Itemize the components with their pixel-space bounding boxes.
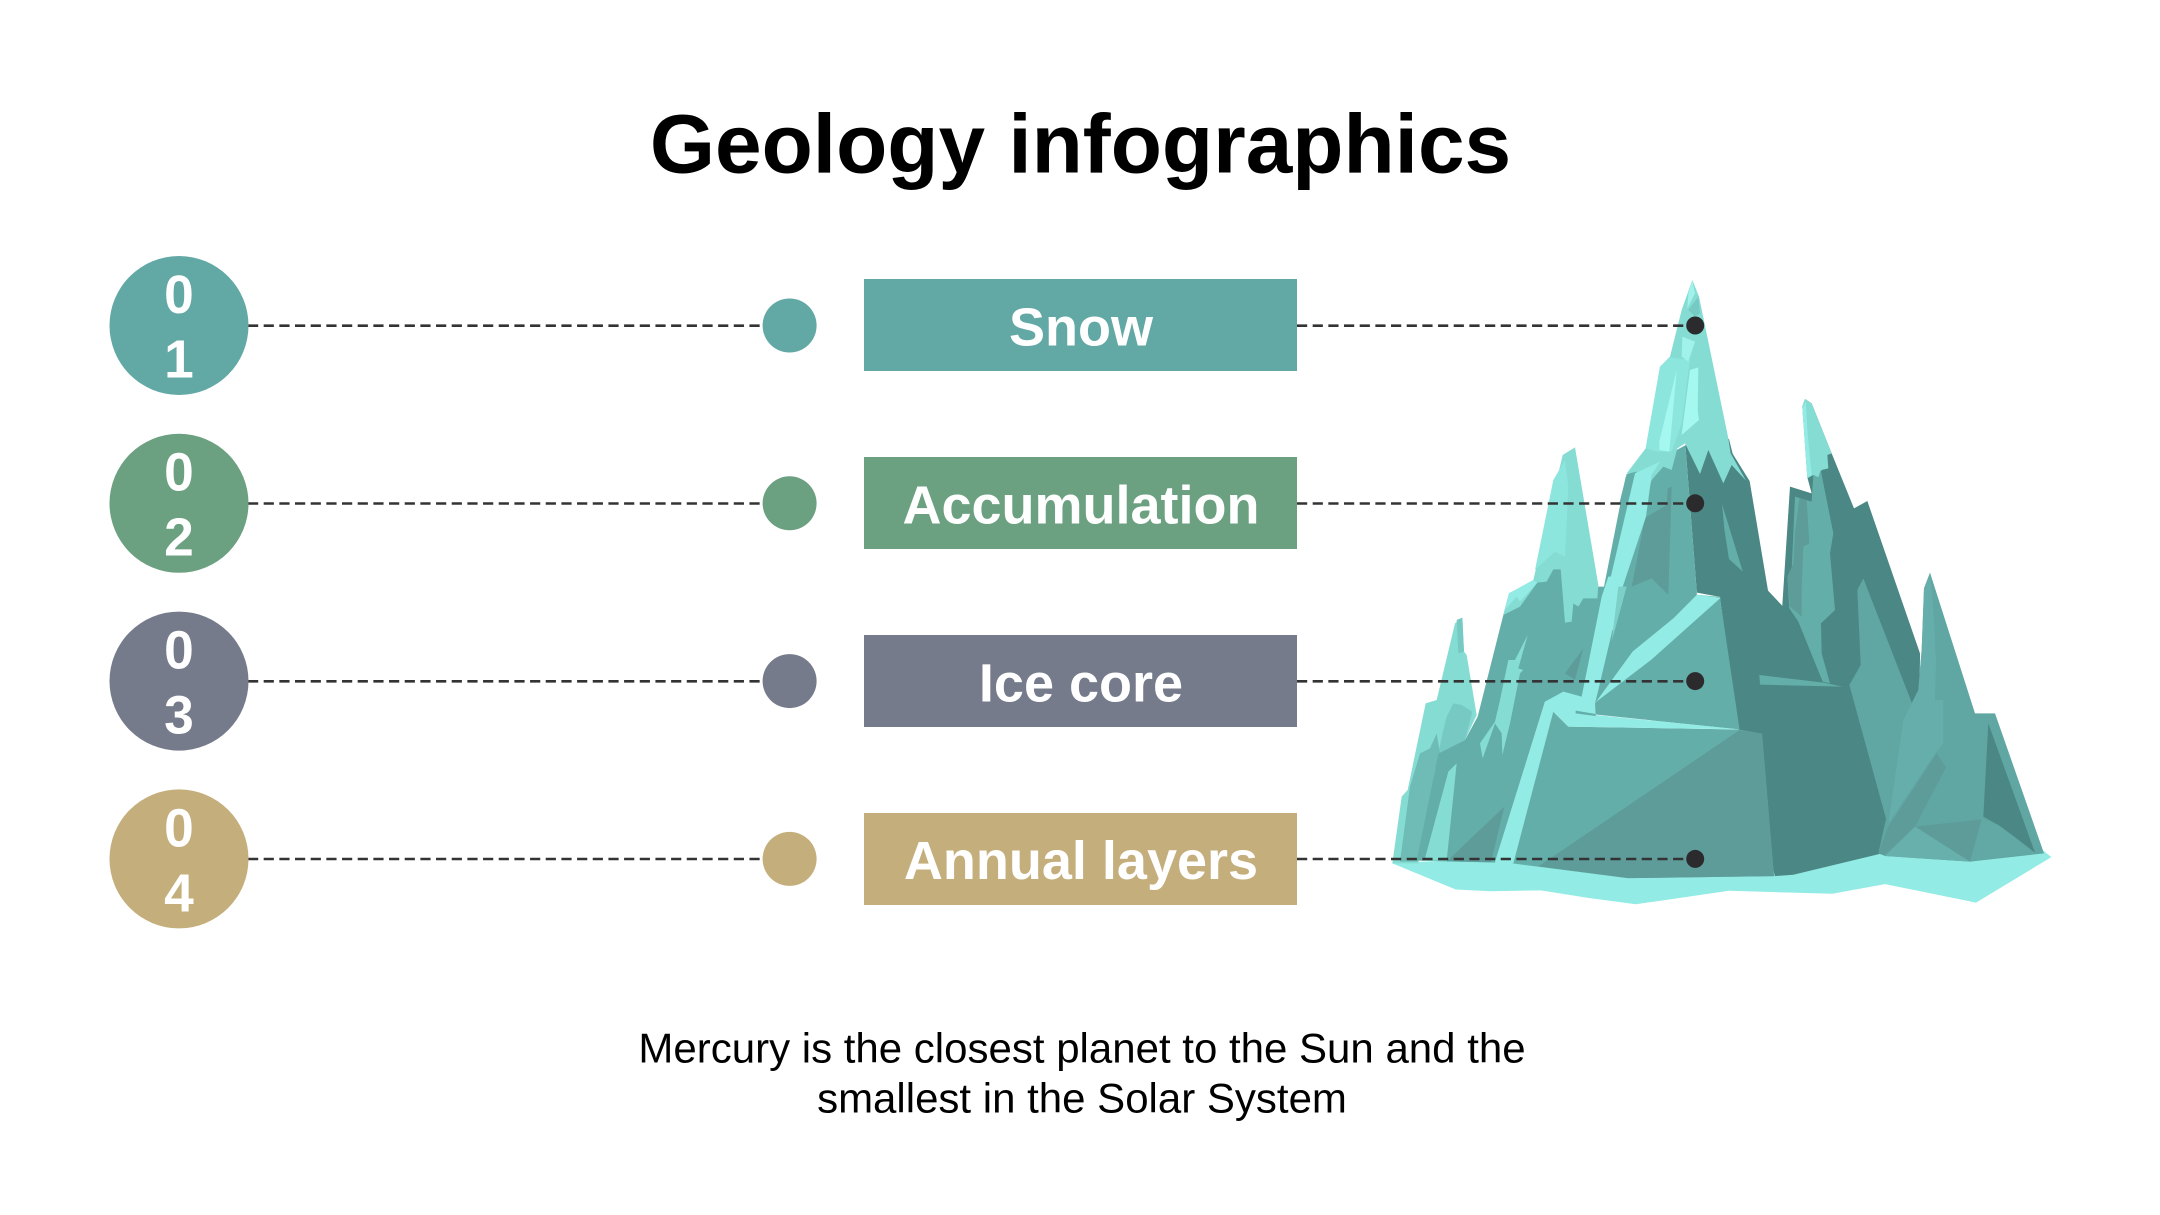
ice base [1391, 851, 2051, 904]
connector lines [248, 502, 1695, 505]
ledge [1759, 675, 1843, 687]
main peak lit side [1582, 445, 1697, 702]
main peak ridge upper [1598, 462, 1660, 630]
connector lines [248, 324, 1695, 327]
main peak slash [1722, 504, 1743, 572]
front block [1512, 595, 1774, 878]
row 04: Annual layers [110, 789, 1704, 928]
description: smallest in the Solar System [817, 1074, 1347, 1122]
connector lines [248, 858, 1695, 860]
connector lines [248, 680, 1695, 683]
dot [1686, 850, 1704, 868]
marker [763, 476, 817, 530]
middle block [1577, 595, 1740, 730]
dot [1686, 672, 1704, 690]
marker [763, 298, 817, 352]
dot [1686, 316, 1704, 334]
number badge 03: 0 [164, 622, 194, 680]
number badge 01 [110, 256, 248, 395]
main peak ridge lower [1495, 577, 1740, 863]
number badge 02: 2 [164, 509, 194, 568]
number badge 02 [110, 434, 248, 573]
main peak snow cap [1619, 280, 1746, 503]
right peak [1782, 399, 1920, 833]
label: Ice core [979, 653, 1183, 713]
main peak dark patch [1632, 487, 1672, 595]
number badge 02: 0 [164, 444, 194, 503]
right front peak [1878, 573, 2044, 862]
label [864, 813, 1297, 905]
dot [1686, 494, 1704, 512]
number badge 04: 4 [164, 864, 194, 923]
main peak dark side [1685, 439, 1894, 876]
row 02: Accumulation [110, 434, 1704, 573]
marker [763, 654, 817, 708]
label: Annual layers [904, 831, 1258, 891]
number badge 01: 1 [164, 331, 194, 390]
number badge 04: 0 [164, 799, 194, 858]
title: Geology infographics [650, 97, 1511, 191]
label [864, 279, 1297, 371]
description [638, 1024, 1526, 1122]
number badge 04 [110, 789, 248, 928]
row 01: Snow [110, 256, 1704, 395]
label [864, 635, 1297, 727]
number badge 01: 0 [164, 266, 194, 325]
label [864, 457, 1297, 549]
second peak snow [1503, 447, 1598, 623]
illustration: ice mountain [1391, 280, 2051, 904]
left peaks lower [1392, 563, 1625, 863]
label: Snow [1009, 298, 1154, 358]
marker [763, 832, 817, 886]
number badge 03: 3 [164, 686, 194, 746]
label: Accumulation [902, 476, 1260, 536]
number badge 03 [110, 612, 248, 751]
description: Mercury is the closest planet to the Sun and the [638, 1024, 1526, 1072]
row 03: Ice core [110, 612, 1704, 751]
